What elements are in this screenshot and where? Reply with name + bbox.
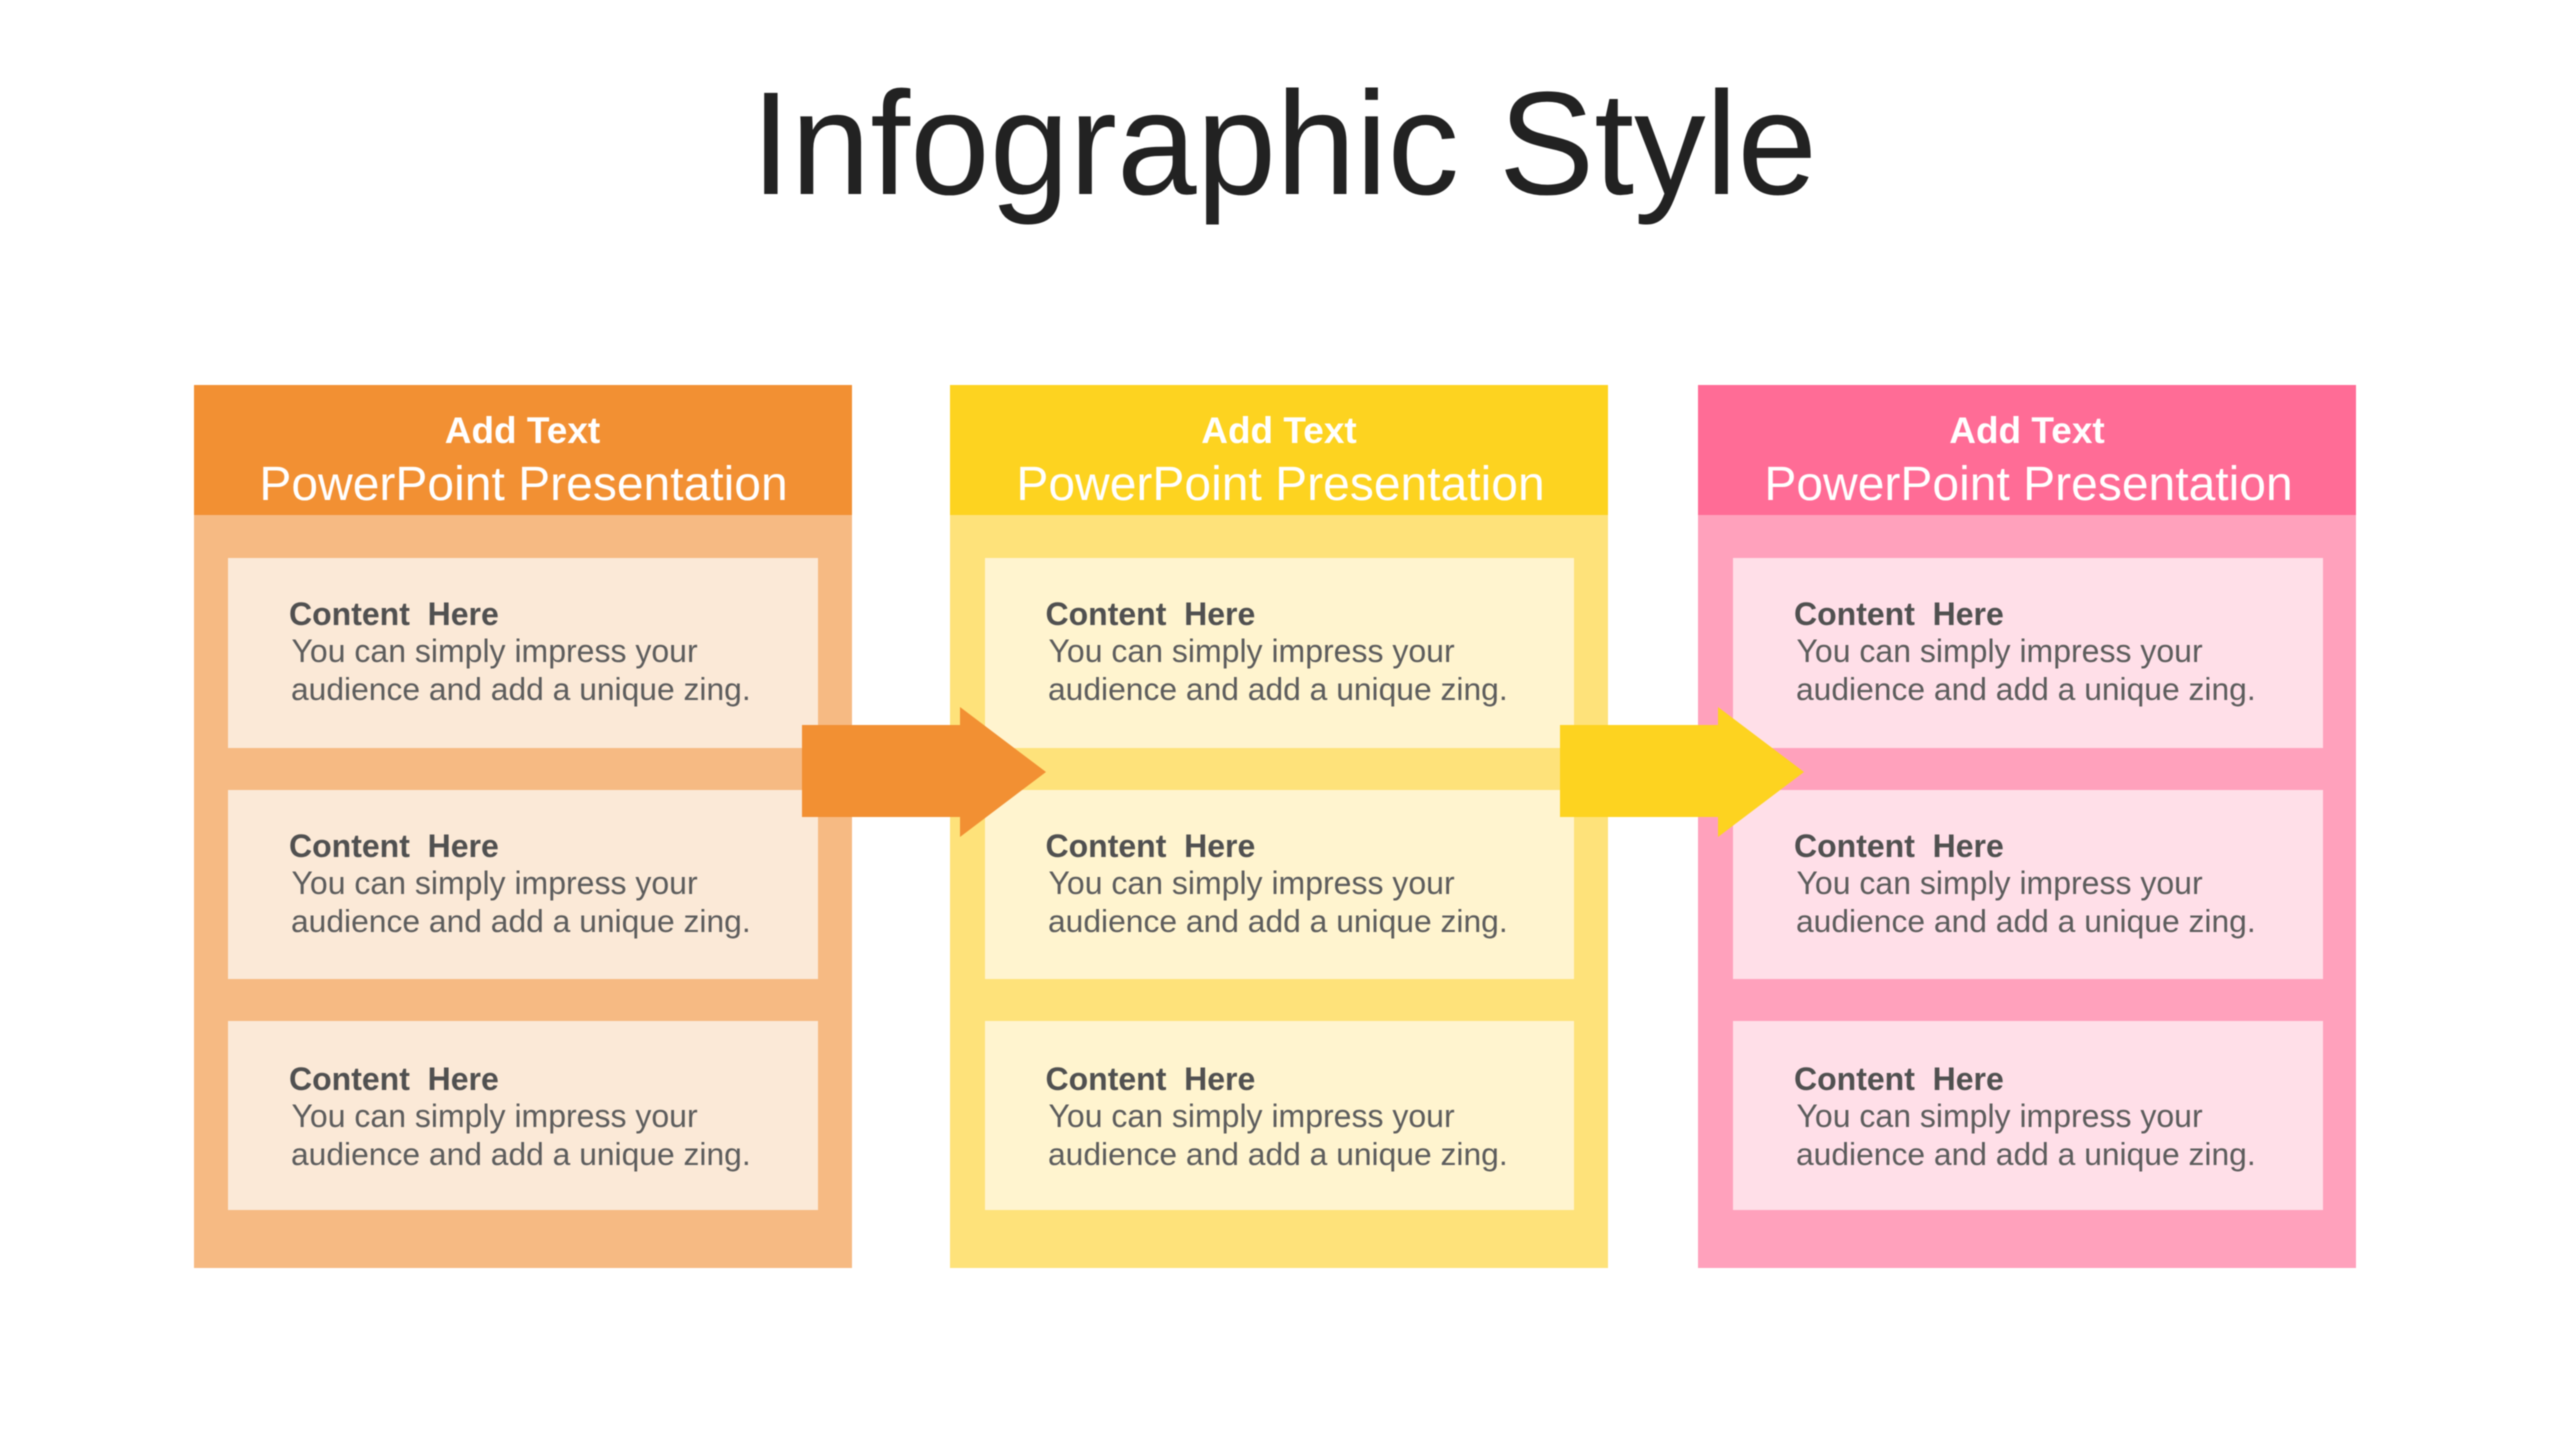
orange card 3: Content Here	[289, 1061, 499, 1097]
pink card 1	[1733, 558, 2323, 748]
pink card 2: You can simply impress your	[1796, 865, 2203, 901]
pink card 3: You can simply impress your	[1796, 1098, 2203, 1134]
pink card 2: audience and add a unique zing.	[1796, 903, 2256, 939]
yellow card 3	[985, 1021, 1574, 1210]
orange card 3: audience and add a unique zing.	[291, 1136, 751, 1172]
orange header	[194, 385, 852, 515]
yellow card 1: You can simply impress your	[1048, 633, 1455, 669]
pink header	[1698, 385, 2356, 515]
pink header: PowerPoint Presentation	[1764, 458, 2293, 511]
orange card 2: audience and add a unique zing.	[291, 903, 751, 939]
yellow header: PowerPoint Presentation	[1016, 458, 1545, 511]
panel: pink column	[1698, 385, 2356, 1268]
title: Infographic Style	[751, 62, 1817, 226]
pink card 2	[1733, 790, 2323, 979]
yellow card 1	[985, 558, 1574, 748]
yellow card 2: Content Here	[1046, 828, 1255, 864]
pink card 1: audience and add a unique zing.	[1796, 671, 2256, 707]
yellow card 2	[985, 790, 1574, 979]
pink card 3: Content Here	[1794, 1061, 2004, 1097]
yellow card 3: You can simply impress your	[1048, 1098, 1455, 1134]
yellow card 3: audience and add a unique zing.	[1048, 1136, 1508, 1172]
yellow card 1: audience and add a unique zing.	[1048, 671, 1508, 707]
pink header: Add Text	[1949, 410, 2105, 451]
pink card 3	[1733, 1021, 2323, 1210]
yellow header: Add Text	[1201, 410, 1357, 451]
orange card 2: You can simply impress your	[292, 865, 698, 901]
panel: yellow column	[950, 385, 1608, 1268]
panel: orange column	[194, 385, 852, 1268]
orange card 1	[228, 558, 818, 748]
orange card 2: Content Here	[289, 828, 499, 864]
orange card 3	[228, 1021, 818, 1210]
orange card 2	[228, 790, 818, 979]
yellow card 2: audience and add a unique zing.	[1048, 903, 1508, 939]
orange card 1: You can simply impress your	[292, 633, 698, 669]
pink card 2: Content Here	[1794, 828, 2004, 864]
arrow: orange to yellow	[802, 707, 1046, 837]
arrow: yellow to pink	[1560, 707, 1804, 837]
yellow header	[950, 385, 1608, 515]
orange header: PowerPoint Presentation	[259, 458, 788, 511]
orange card 1: Content Here	[289, 596, 499, 632]
pink card 1: You can simply impress your	[1796, 633, 2203, 669]
pink card 3: audience and add a unique zing.	[1796, 1136, 2256, 1172]
yellow card 1: Content Here	[1046, 596, 1255, 632]
pink card 1: Content Here	[1794, 596, 2004, 632]
orange card 1: audience and add a unique zing.	[291, 671, 751, 707]
yellow card 3: Content Here	[1046, 1061, 1255, 1097]
yellow card 2: You can simply impress your	[1048, 865, 1455, 901]
orange header: Add Text	[445, 410, 600, 451]
orange card 3: You can simply impress your	[292, 1098, 698, 1134]
